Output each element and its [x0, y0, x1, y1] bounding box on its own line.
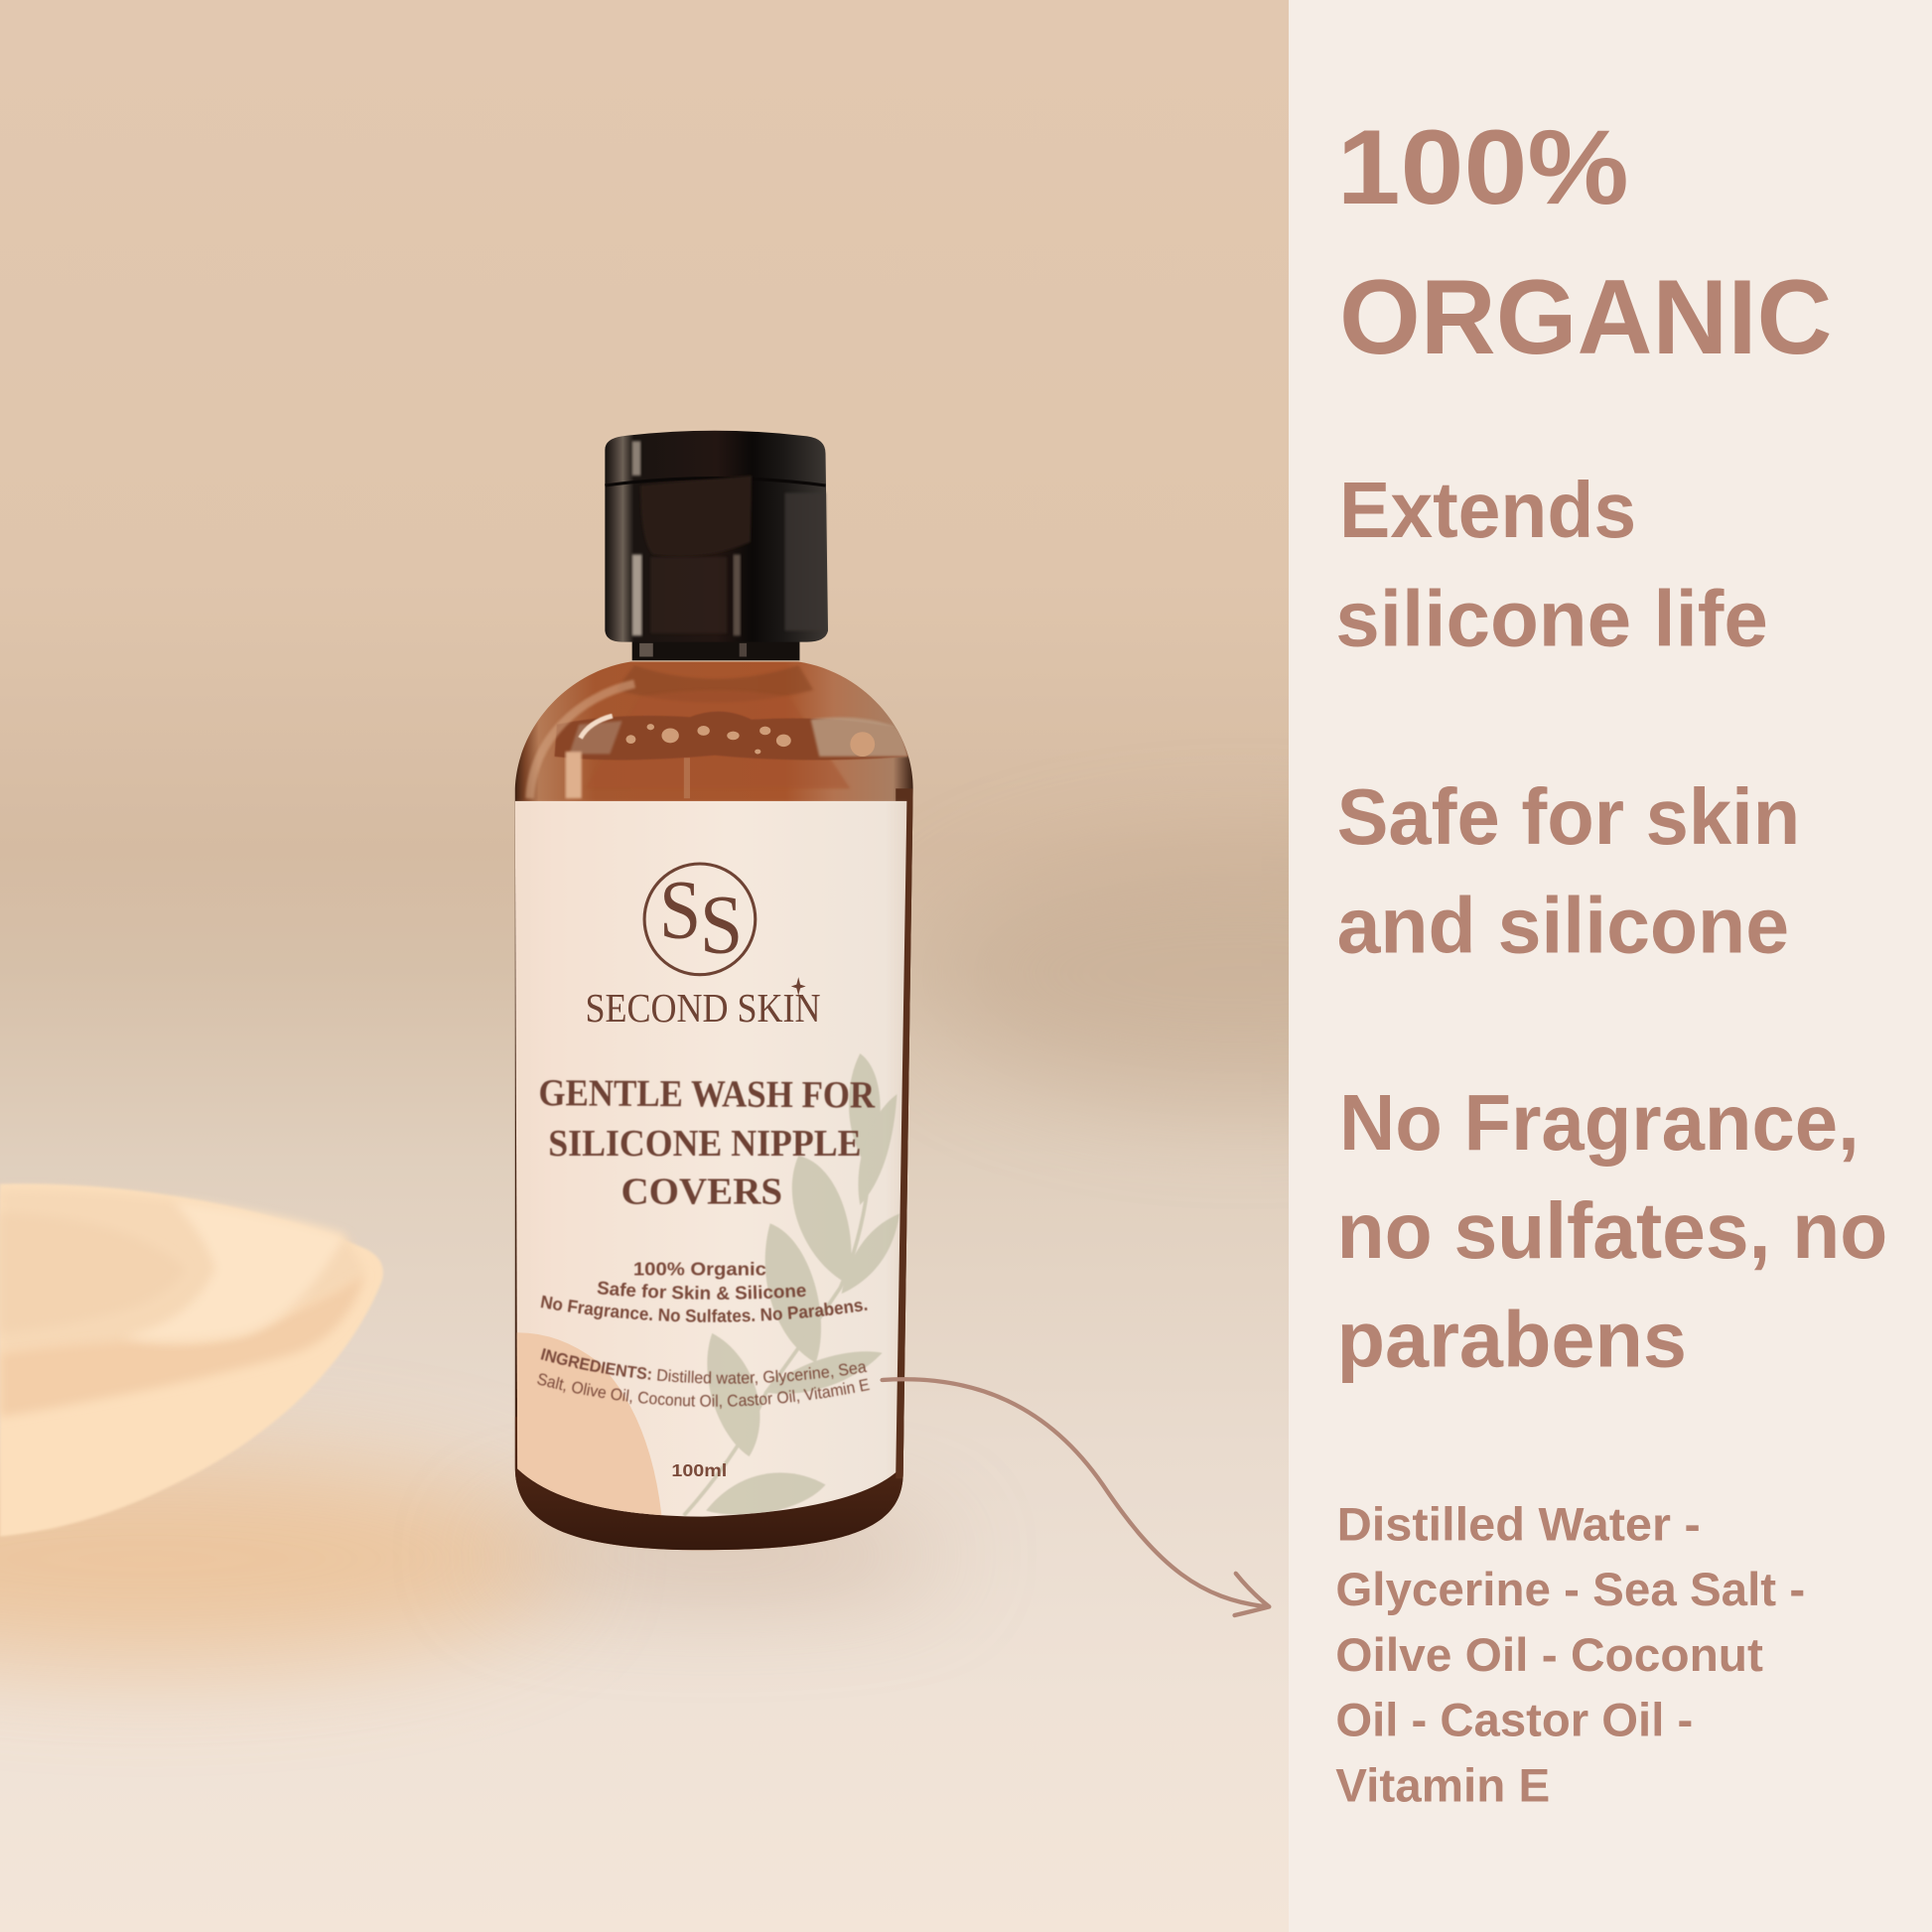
label ingredients: Salt, Olive Oil, Coconut Oil, Castor Oil, Vitamin E	[536, 1372, 871, 1410]
label volume: 100ml	[671, 1460, 727, 1480]
heading: 100% organic: 100%	[1337, 107, 1629, 226]
heading: 100% organic: ORGANIC	[1339, 257, 1832, 376]
ingredients list: Glycerine - Sea Salt -	[1335, 1563, 1805, 1615]
bottle body	[515, 661, 913, 1550]
benefit: safe for skin and silicone: Safe for skin	[1337, 772, 1800, 861]
label heading: SILICONE NIPPLE	[548, 1123, 862, 1165]
ingredients list: Oil - Castor Oil -	[1335, 1694, 1693, 1746]
label logo: SS monogram	[644, 864, 756, 975]
label logo: SS monogram: S	[700, 879, 743, 971]
label brand name: SECOND SKIN	[586, 986, 821, 1031]
silicone upper inside	[0, 1190, 364, 1353]
ingredients list	[1335, 1497, 1805, 1811]
silicone highlight	[137, 1205, 340, 1342]
silicone inner shade	[0, 1213, 185, 1333]
label heading: COVERS	[621, 1172, 782, 1213]
benefit: free from list: No Fragrance,	[1339, 1078, 1860, 1167]
label claims: Safe for Skin & Silicone	[597, 1281, 806, 1301]
benefit: free from list: no sulfates, no	[1337, 1186, 1887, 1275]
label heading	[538, 1072, 876, 1213]
bottle cap	[605, 431, 828, 660]
label heading: GENTLE WASH FOR	[538, 1072, 876, 1117]
benefit: extends silicone life	[1335, 466, 1768, 662]
benefit: free from list	[1337, 1078, 1887, 1383]
ingredients list: Vitamin E	[1335, 1758, 1550, 1811]
benefit: free from list: parabens	[1337, 1295, 1687, 1383]
ingredients list: Oilve Oil - Coconut	[1335, 1628, 1763, 1681]
bottle label	[505, 788, 918, 1528]
liquid and foam	[505, 665, 924, 1559]
benefit: extends silicone life: silicone life	[1335, 574, 1768, 662]
label claims: 100% Organic	[633, 1259, 766, 1280]
benefit: safe for skin and silicone: and silicone	[1337, 881, 1789, 969]
label claims: No Fragrance. No Sulfates. No Parabens.	[540, 1295, 868, 1323]
benefit: extends silicone life: Extends	[1339, 466, 1636, 554]
label ingredients: INGREDIENTS: Distilled water, Glycerine, Sea	[540, 1348, 868, 1386]
silicone outer bowl	[0, 1183, 383, 1537]
heading: 100% organic	[1337, 107, 1832, 376]
benefit: safe for skin and silicone	[1337, 772, 1800, 969]
product bottle	[514, 431, 913, 1551]
label ingredients	[536, 1348, 871, 1410]
leaf sprig	[684, 1053, 899, 1516]
arrow: ingredients to list	[883, 1379, 1269, 1615]
label claims	[540, 1259, 868, 1323]
silicone lower inside shadow	[0, 1274, 364, 1417]
panel: product photo background	[0, 0, 1289, 1932]
panel: benefits	[1289, 0, 1932, 1932]
silicone cover	[0, 1183, 383, 1537]
ingredients list: Distilled Water -	[1337, 1497, 1701, 1550]
peach blob	[516, 1332, 661, 1515]
label logo: SS monogram: S	[659, 864, 701, 956]
